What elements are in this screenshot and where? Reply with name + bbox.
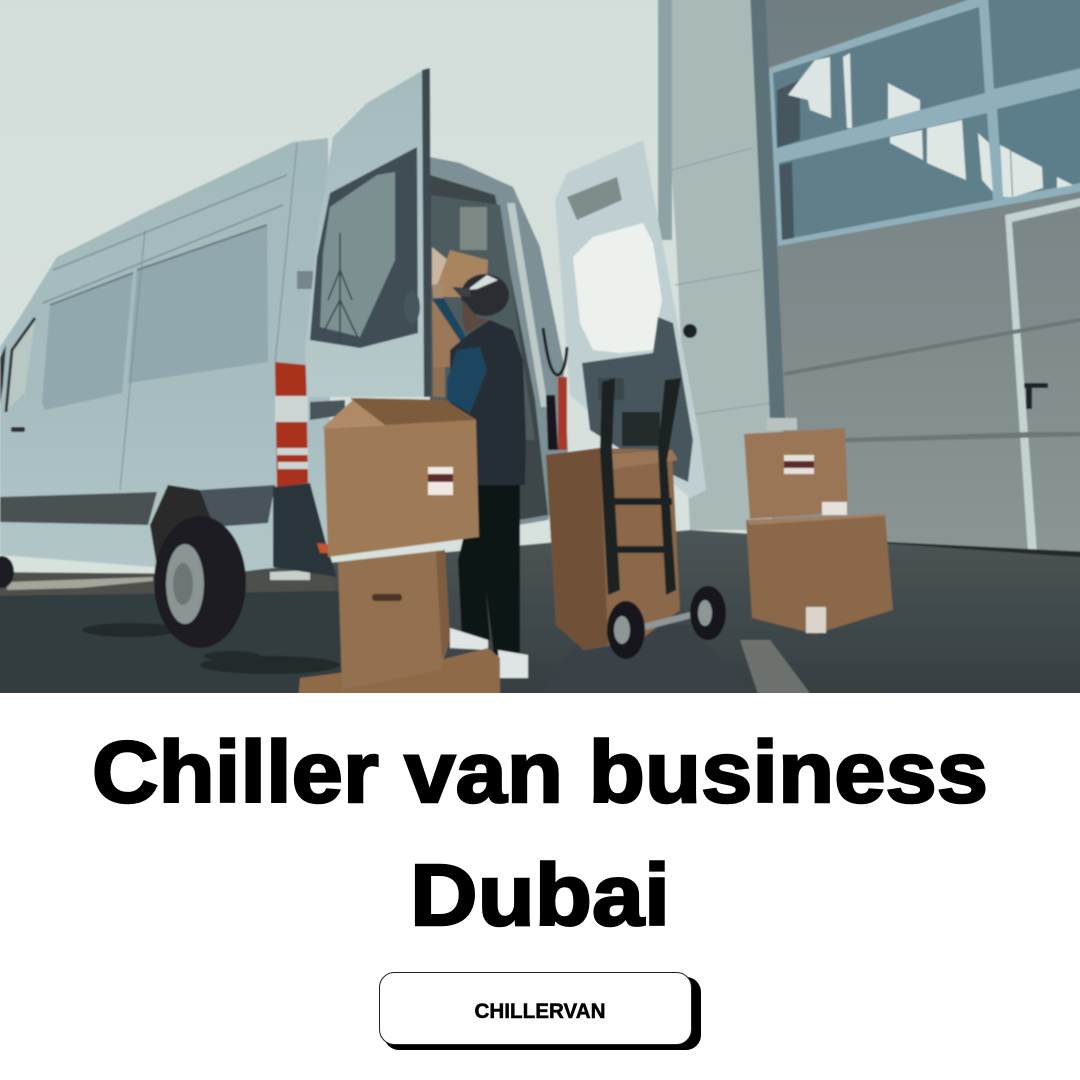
title: Chiller van business xyxy=(92,724,988,821)
open rear door left xyxy=(305,68,431,420)
front wheel xyxy=(0,485,246,648)
title: Dubai xyxy=(410,847,670,944)
building with shutter door and windows xyxy=(658,0,1080,560)
photo: van being loaded with boxes xyxy=(0,0,1080,710)
van body xyxy=(0,138,337,577)
hand truck with boxes xyxy=(546,378,726,659)
stacked cardboard boxes left xyxy=(298,398,500,700)
stacked cardboard boxes right xyxy=(744,418,893,634)
open rear door right xyxy=(555,140,706,498)
button: CHILLERVAN: CHILLERVAN xyxy=(474,1000,606,1023)
button: CHILLERVAN xyxy=(380,972,701,1050)
title xyxy=(92,724,988,944)
interior of van xyxy=(430,157,568,540)
man loading boxes xyxy=(432,274,528,678)
ground xyxy=(244,529,1080,693)
